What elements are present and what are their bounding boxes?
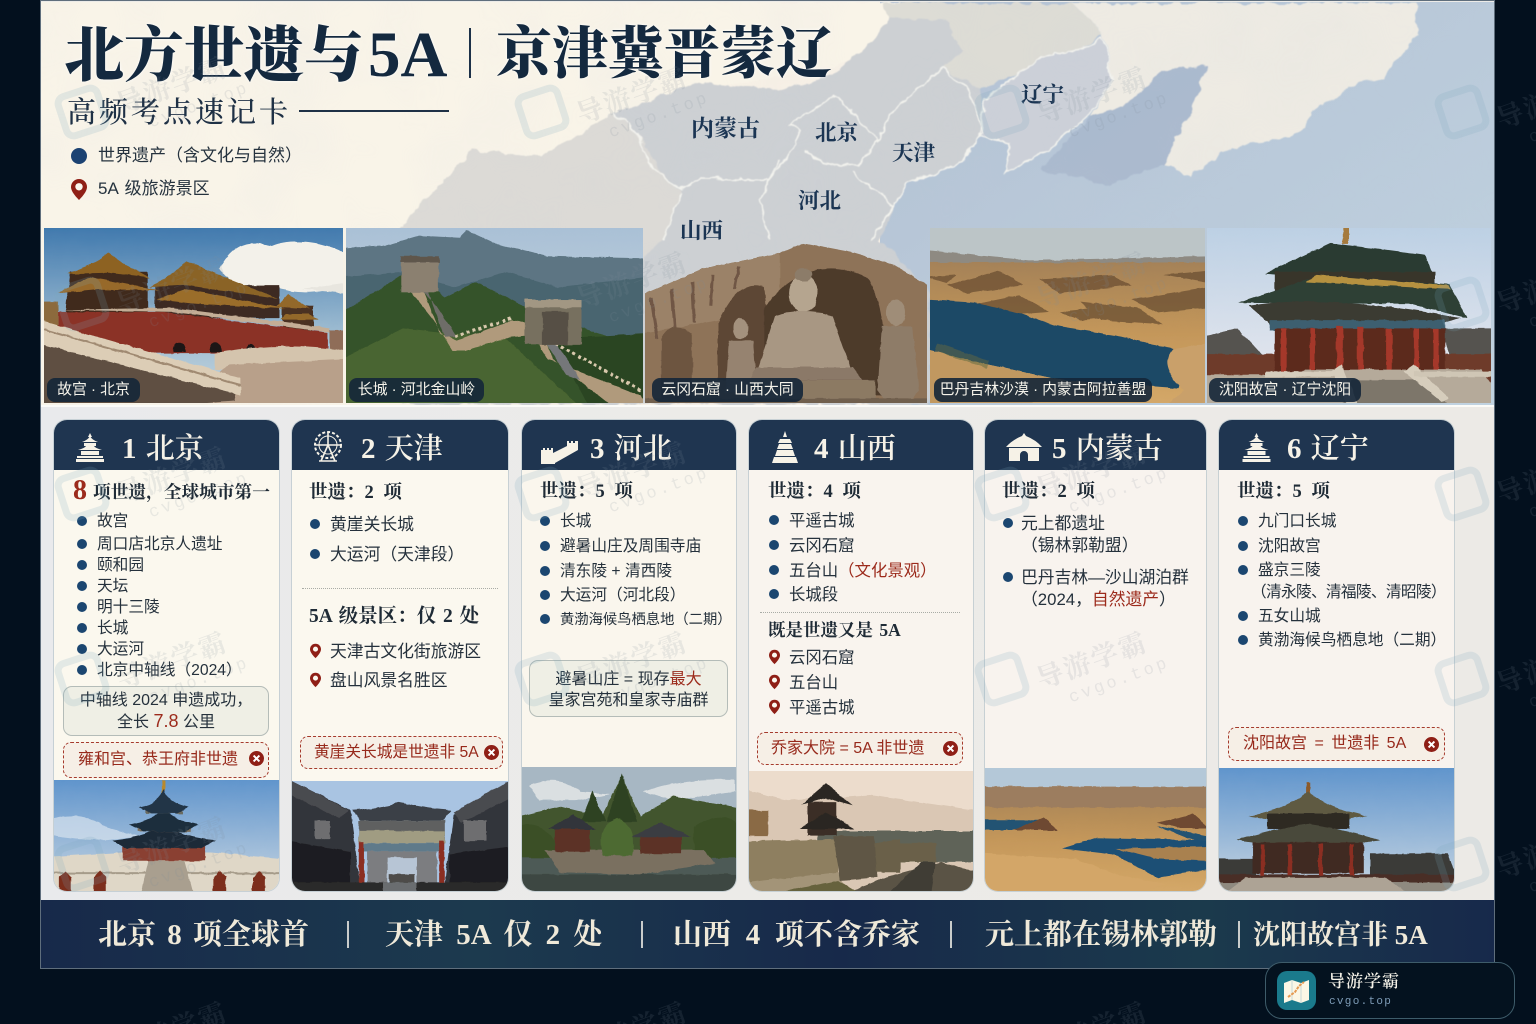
watermarks: cvgo.top <box>147 839 252 893</box>
heading: 3 河北: 3 河北 <box>590 433 672 465</box>
watermarks: cvgo.top <box>1067 89 1172 143</box>
list: 世遗: 周口店北京人遗址 <box>97 536 222 553</box>
list: 世遗: 北京中轴线（2024） <box>97 662 242 679</box>
header: 辽宁 <box>1219 420 1454 470</box>
header: 河北 <box>522 420 736 470</box>
watermarks: cvgo.top <box>147 469 252 523</box>
list: 世遗: 清东陵 + 清西陵 <box>560 563 672 580</box>
watermarks: 导游学霸 <box>112 252 232 320</box>
panel: 辽宁 <box>1219 420 1454 891</box>
panel: 河北 <box>522 420 736 891</box>
stat headline <box>73 475 270 506</box>
watermarks: 导游学霸 <box>572 62 692 130</box>
banner divider 4 <box>1238 921 1240 948</box>
header: 内蒙古 <box>985 420 1206 470</box>
photo: 长城 <box>346 228 643 403</box>
lower panel background <box>41 405 1494 900</box>
banner divider 3 <box>950 921 952 948</box>
list: 世遗: 长城 <box>560 513 591 530</box>
note: 避暑山庄: 皇家宫苑和皇家寺庙群 <box>548 692 708 709</box>
caption: 巴丹吉林沙漠 <box>934 378 1152 402</box>
map label: 河北: 河北 <box>798 189 841 213</box>
warning: 沈阳故宫: 沈阳故宫 = 世遗非 5A <box>1243 735 1406 752</box>
watermarks: 导游学霸 <box>1032 437 1152 505</box>
warning: 沈阳故宫 <box>1228 727 1445 761</box>
subheading: 5A: 5A 级景区：仅 2 处 <box>309 606 479 627</box>
watermarks: 导游学霸 <box>572 627 692 695</box>
icon: temple <box>76 433 104 462</box>
note: 中轴线: 中轴线 2024 申遗成功， <box>80 692 252 709</box>
heading: 4 山西: 4 山西 <box>814 433 896 465</box>
list: 世遗: 避暑山庄及周围寺庙 <box>560 538 701 555</box>
warning: 乔家大院: 乔家大院 = 5A 非世遗 <box>771 740 924 757</box>
caption: 云冈石窟 <box>652 378 803 402</box>
legend: world heritage label: 世界遗产（含文化与自然） <box>98 146 302 165</box>
header: 天津 <box>292 420 508 470</box>
caption: 故宫: 故宫 · 北京 <box>57 382 130 398</box>
banner divider 1 <box>347 921 348 948</box>
divider <box>302 588 498 589</box>
banner phrase: 天津: 天津 5A 仅 2 处 <box>385 919 602 951</box>
photo: 沈阳故宫 <box>1207 228 1491 403</box>
watermarks: cvgo.top <box>147 79 252 133</box>
panel: 北京 <box>54 420 279 891</box>
list: 世遗 <box>769 512 937 604</box>
map label: 天津: 天津 <box>892 141 935 165</box>
caption: 沈阳故宫: 沈阳故宫 · 辽宁沈阳 <box>1219 382 1351 398</box>
photo: 故宫 <box>44 228 343 403</box>
subtitle: 高频考点速记卡 <box>67 97 291 129</box>
caption: 沈阳故宫 <box>1209 378 1361 402</box>
watermarks: cvgo.top <box>1067 654 1172 708</box>
list: 世遗: 元上都遗址 <box>1021 514 1105 533</box>
list: 世遗: 明十三陵 <box>97 599 160 616</box>
photo: 云冈石窟 <box>645 244 927 403</box>
list: 5A <box>310 642 481 690</box>
watermarks: cvgo.top <box>607 654 712 708</box>
list: 世遗: 颐和园 <box>97 557 144 574</box>
caption: 长城: 长城 · 河北金山岭 <box>358 382 475 398</box>
note: 中轴线: 全长 7.8 公里 <box>117 711 215 731</box>
watermarks: 导游学霸 <box>1032 627 1152 695</box>
photo: 平遥古城 <box>749 771 973 891</box>
big number 8: 8 <box>73 475 87 506</box>
stat: 世遗 4 项: 世遗：4 项 <box>768 482 861 502</box>
photo: 沈阳故宫 <box>1219 768 1454 891</box>
list: 世遗: 云冈石窟 <box>789 537 855 555</box>
brand badge <box>1265 962 1515 1019</box>
list: 世遗: 巴丹吉林—沙山湖泊群 <box>1021 568 1189 587</box>
watermarks: cvgo.top <box>1067 464 1172 518</box>
legend: 5A label: 5A 级旅游景区 <box>98 179 210 198</box>
list: 世遗 <box>540 512 732 628</box>
stat: 世遗 5 项: 世遗：5 项 <box>540 482 633 502</box>
watermarks: 导游学霸 <box>112 812 232 880</box>
divider <box>760 612 960 613</box>
title right part: 京津冀晋蒙辽 <box>496 24 832 86</box>
list: 世遗: （2024，自然遗产） <box>1021 590 1176 609</box>
icon: pagoda <box>772 431 798 463</box>
map label: 内蒙古: 内蒙古 <box>691 116 760 141</box>
list: 世遗 <box>77 512 242 679</box>
list: 5A: 盘山风景名胜区 <box>330 671 447 690</box>
list: 世遗: 平遥古城 <box>789 512 855 530</box>
icon: palace <box>1242 433 1270 462</box>
watermarks: 导游学霸 <box>112 442 232 510</box>
header: 北京 <box>54 420 279 470</box>
stat: 世遗 5 项: 世遗：5 项 <box>1237 482 1330 502</box>
list: 世遗: （清永陵、清福陵、清昭陵） <box>1251 584 1446 601</box>
map label: 北京: 北京 <box>815 121 858 145</box>
heading: 1 北京: 1 北京 <box>122 433 204 465</box>
list: 5A: 平遥古城 <box>789 699 855 717</box>
caption: 故宫 <box>47 378 140 402</box>
list: 世遗: 黄崖关长城 <box>330 515 414 534</box>
list: 世遗: 大运河（天津段） <box>330 545 464 564</box>
list: 世遗: 长城 <box>97 620 128 637</box>
photo: 巴丹吉林沙漠 <box>930 228 1205 403</box>
panel: 天津 <box>292 420 508 891</box>
list: 世遗: 九门口长城 <box>1258 513 1336 530</box>
list: 世遗: 五台山（文化景观） <box>789 562 937 580</box>
banner phrase: 北京: 北京 8 项全球首 <box>98 919 309 951</box>
warning: 乔家大院 <box>757 732 963 765</box>
map background <box>41 2 1494 405</box>
list: 世遗 <box>310 515 464 564</box>
list: 世遗: 故宫 <box>97 513 128 530</box>
bottom banner <box>41 900 1494 968</box>
stat: 世遗 2 项: 世遗：2 项 <box>309 483 402 503</box>
list: 世遗 <box>1003 514 1189 609</box>
warning: 黄崖关 <box>300 736 503 769</box>
title left part: 北方世遗与5A <box>64 19 447 91</box>
legend: 5A pin <box>71 179 87 200</box>
caption: 长城 <box>349 378 484 402</box>
watermarks: cvgo.top <box>1067 274 1172 328</box>
watermarks: 导游学霸 <box>112 627 232 695</box>
list: 世遗: 长城段 <box>789 586 838 604</box>
stat text: 项世遗，全球城市第一 <box>93 482 270 502</box>
banner phrase: 山西: 山西 4 项不含乔家 <box>673 919 920 951</box>
map label: 山西: 山西 <box>680 219 723 243</box>
watermarks: 导游学霸 <box>1032 62 1152 130</box>
watermarks: 导游学霸 <box>1032 247 1152 315</box>
subtitle rule <box>299 110 449 112</box>
header: 山西 <box>749 420 973 470</box>
list: 5A: 云冈石窟 <box>789 649 855 667</box>
photo: 巴丹吉林 <box>985 768 1206 891</box>
map label: 辽宁: 辽宁 <box>1021 83 1064 107</box>
list: 5A: 天津古文化街旅游区 <box>330 642 481 661</box>
banner phrase: 沈阳: 沈阳故宫非 5A <box>1253 920 1428 950</box>
stat: 世遗 2 项: 世遗：2 项 <box>1002 482 1095 502</box>
list: 世遗: 盛京三陵 <box>1258 562 1321 579</box>
heading: 5 内蒙古: 5 内蒙古 <box>1052 433 1163 465</box>
photo: 避暑山庄 <box>522 767 736 891</box>
title divider <box>469 28 471 78</box>
list: 世遗: 大运河（河北段） <box>560 587 686 604</box>
watermarks: 导游学霸 <box>572 247 692 315</box>
watermarks: cvgo.top <box>607 89 712 143</box>
list: 5A <box>769 648 855 717</box>
list: 5A: 五台山 <box>789 674 838 692</box>
panel: 内蒙古 <box>985 420 1206 891</box>
brand name: 导游学霸 <box>1328 972 1400 991</box>
icon: yurt <box>1006 433 1042 461</box>
watermarks: cvgo.top <box>607 274 712 328</box>
warning: 雍和宫: 雍和宫、恭王府非世遗 <box>78 751 238 768</box>
watermarks: cvgo.top <box>147 279 252 333</box>
watermarks: cvgo.top <box>147 654 252 708</box>
caption: 巴丹吉林沙漠: 巴丹吉林沙漠 · 内蒙古阿拉善盟 <box>940 382 1146 398</box>
heading: 6 辽宁: 6 辽宁 <box>1287 433 1369 465</box>
list: 世遗 <box>1238 512 1446 649</box>
legend <box>71 146 302 200</box>
panel: 山西 <box>749 420 973 891</box>
list: 世遗: 天坛 <box>97 578 128 595</box>
banner phrase: 元上都: 元上都在锡林郭勒 <box>985 919 1217 951</box>
subheading: 既是世遗又是 5A: 既是世遗又是 5A <box>768 620 901 640</box>
icon: brand map <box>1277 971 1316 1010</box>
title <box>64 19 832 91</box>
list: 世遗: （锡林郭勒盟） <box>1021 536 1138 555</box>
brand url: cvgo.top <box>1329 996 1392 1008</box>
note: 避暑山庄 <box>529 660 728 717</box>
list: 世遗: 五女山城 <box>1258 608 1321 625</box>
warning: 雍和宫 <box>63 742 269 778</box>
caption: 云冈石窟: 云冈石窟 · 山西大同 <box>661 382 794 398</box>
list: 世遗: 沈阳故宫 <box>1258 538 1321 555</box>
list: 世遗: 大运河 <box>97 641 144 658</box>
icon: great wall <box>541 441 578 464</box>
note: 避暑山庄: 避暑山庄 = 现存最大 <box>555 671 702 688</box>
watermarks: cvgo.top <box>607 464 712 518</box>
legend: world heritage dot <box>71 148 87 164</box>
list: 世遗: 黄渤海候鸟栖息地（二期） <box>1258 632 1446 649</box>
warning: 黄崖关: 黄崖关长城是世遗非 5A <box>314 744 479 761</box>
list: 世遗: 黄渤海候鸟栖息地（二期） <box>560 612 732 628</box>
icon: ferris wheel <box>314 431 342 462</box>
banner divider 2 <box>641 921 642 948</box>
photo: 天坛 <box>54 780 279 891</box>
photo: 古文化街 <box>292 781 508 891</box>
heading: 2 天津: 2 天津 <box>361 433 443 465</box>
watermarks: 导游学霸 <box>112 52 232 120</box>
note: 中轴线 <box>63 686 269 736</box>
watermarks: 导游学霸 <box>572 437 692 505</box>
